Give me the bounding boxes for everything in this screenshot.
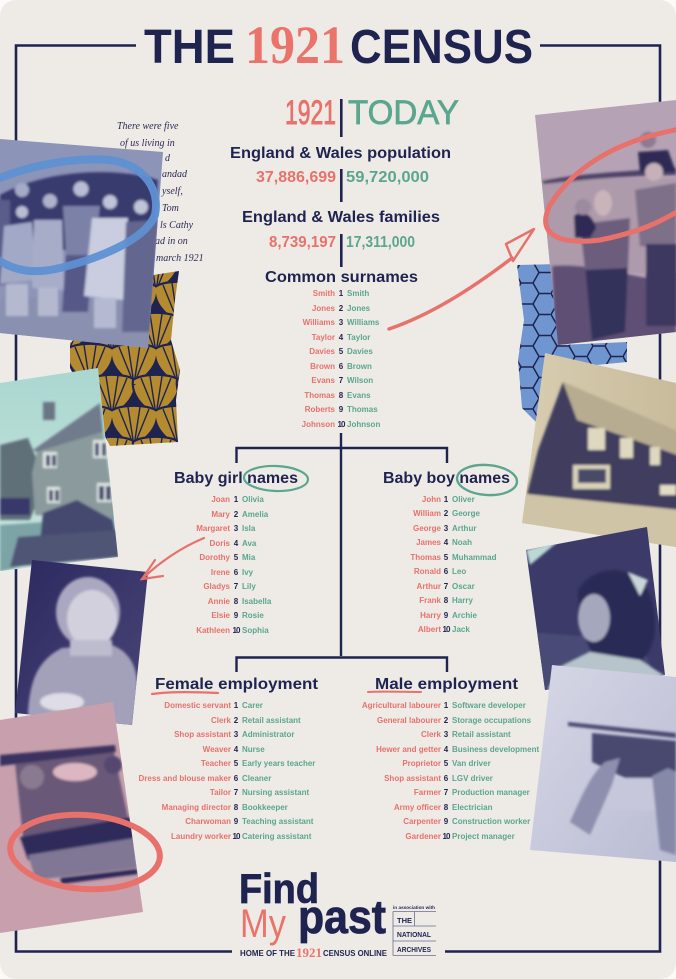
male employment list: Carpenter [403, 817, 441, 826]
baby girl names list: 1 [234, 495, 239, 504]
baby boy names list: Arthur [452, 524, 476, 533]
baby boy names list: Baby boy names [383, 470, 510, 487]
baby boy names list: Jack [452, 625, 470, 634]
common surnames list: 8 [339, 391, 344, 400]
female employment list: Tailor [210, 788, 231, 797]
baby girl names list: 4 [234, 539, 239, 548]
female employment list: Managing director [162, 803, 231, 812]
logo: Findmypast [239, 865, 387, 960]
title: 1921 [245, 15, 345, 75]
handwritten note: Tom [162, 203, 179, 214]
baby girl names list: Sophia [242, 626, 269, 635]
arrow: names to baby photo [142, 538, 204, 579]
baby boy names list: Muhammad [452, 553, 497, 562]
blue ellipse annotation [0, 159, 156, 271]
baby boy names list: 1 [444, 495, 449, 504]
art deco paper scrap [70, 271, 180, 446]
male employment list: Proprietor [402, 759, 441, 768]
male employment list: Army officer [394, 803, 441, 812]
baby boy names list: John [422, 495, 441, 504]
common surnames list: Wilson [347, 376, 373, 385]
female employment list: 9 [234, 817, 239, 826]
male employment list: Storage occupations [452, 716, 532, 725]
baby girl names list: Gladys [203, 582, 231, 591]
population statistic: England & Wales population [230, 145, 451, 162]
baby boy names list: William [413, 509, 441, 518]
female employment list: Teaching assistant [242, 817, 314, 826]
handwritten note: march 1921 [156, 253, 204, 264]
baby girl names list: Doris [210, 539, 231, 548]
baby girl names list: Dorothy [199, 553, 231, 562]
common surnames list: Evans [347, 391, 371, 400]
common surnames list: Johnson [302, 420, 335, 429]
beach scene with parents and children [530, 132, 676, 350]
baby boy names list: Harry [420, 611, 442, 620]
female employment list: 3 [234, 730, 239, 739]
hexagon paper scrap [517, 264, 627, 422]
baby girl names list: Isabella [242, 597, 272, 606]
female employment list: Female employment [155, 676, 319, 693]
common surnames list [265, 269, 418, 429]
baby boy names list: 5 [444, 553, 449, 562]
male employment list: Van driver [452, 759, 491, 768]
female employment list [139, 676, 319, 841]
handwritten note: of us living in [120, 138, 175, 149]
baby boy names list: James [416, 538, 442, 547]
female employment list: 10 [233, 832, 241, 841]
baby girl names list: 2 [234, 510, 239, 519]
female employment list: Clerk [211, 716, 232, 725]
photo: cottage [0, 368, 118, 571]
baby girl names list: Kathleen [196, 626, 230, 635]
baby boy names list: 4 [444, 538, 449, 547]
handwritten note [117, 121, 204, 264]
comparison header: 1921 and today [285, 94, 459, 137]
red ellipse annotation [8, 810, 162, 894]
baby girl names list: 8 [234, 597, 239, 606]
baby boy names list: Archie [452, 611, 477, 620]
male employment list: 7 [444, 788, 449, 797]
baby girl names list: Ava [242, 539, 257, 548]
female employment list: Nurse [242, 745, 265, 754]
male employment list [362, 676, 539, 841]
female employment list: 4 [234, 745, 239, 754]
male employment list: 8 [444, 803, 449, 812]
male employment list: Gardener [405, 832, 441, 841]
common surnames list: Thomas [304, 391, 336, 400]
male employment list: Retail assistant [452, 730, 511, 739]
photo: typewriter [0, 700, 150, 940]
female employment list: Retail assistant [242, 716, 301, 725]
baby girl names list: 5 [234, 553, 239, 562]
male employment list: 9 [444, 817, 449, 826]
female employment list: Carer [242, 701, 263, 710]
arrow: surnames to family photo [389, 229, 534, 329]
common surnames list: Roberts [305, 405, 336, 414]
female employment list: Charwoman [185, 817, 231, 826]
common surnames list: Johnson [347, 420, 380, 429]
baby girl names list: 3 [234, 524, 239, 533]
logo: The National Archives: NATIONAL [397, 932, 432, 939]
handwritten note: There were five [117, 121, 179, 132]
common surnames list: 2 [339, 304, 344, 313]
families statistic: England & Wales families [242, 209, 440, 226]
baby girl names list: Lily [242, 582, 256, 591]
baby girl names list: 9 [234, 611, 239, 620]
male employment list: 3 [444, 730, 449, 739]
male employment list: General labourer [377, 716, 441, 725]
baby boy names list: 7 [444, 582, 449, 591]
photo: baby [15, 560, 148, 725]
baby girl names list: Mary [211, 510, 231, 519]
baby boy names list: Ronald [414, 567, 441, 576]
female employment list: 7 [234, 788, 239, 797]
common surnames list: 9 [339, 405, 344, 414]
common surnames list: Taylor [347, 333, 370, 342]
common surnames list: Evans [311, 376, 336, 385]
male employment list: Production manager [452, 788, 530, 797]
handwritten note: ad in on [155, 236, 188, 247]
title: THE [144, 21, 235, 74]
common surnames list: 1 [339, 289, 344, 298]
male employment list: Business development [452, 745, 539, 754]
female employment list: Laundry worker [171, 832, 231, 841]
female employment list: 2 [234, 716, 239, 725]
common surnames list: 7 [339, 376, 344, 385]
common surnames list: Smith [347, 289, 369, 298]
logo: Findmypast: HOME OF THE [240, 948, 295, 958]
figures: family group [0, 170, 160, 348]
baby girl names list: Margaret [196, 524, 230, 533]
population statistic [230, 145, 451, 202]
baby girl names list: 7 [234, 582, 239, 591]
male employment list: 5 [444, 759, 449, 768]
female employment list: 1 [234, 701, 239, 710]
handwritten note: andad [162, 169, 188, 180]
male employment list: Agricultural labourer [362, 701, 441, 710]
common surnames list: Thomas [347, 405, 378, 414]
common surnames list: Common surnames [265, 269, 418, 286]
male employment list: 10 [443, 832, 451, 841]
title [144, 15, 533, 75]
families statistic: 17,311,000 [346, 234, 415, 251]
laptop and hands [568, 722, 676, 855]
baby girl names list: Baby girl names [174, 470, 298, 487]
logo: The National Archives: THE [397, 916, 412, 925]
common surnames list: 6 [339, 362, 344, 371]
cottage scene [0, 402, 120, 572]
female employment list: Cleaner [242, 774, 271, 783]
red ellipse annotation: modern family [546, 129, 676, 241]
male employment list: Shop assistant [384, 774, 441, 783]
female employment list: Dress and blouse maker [139, 774, 231, 783]
baby boy names list: George [413, 524, 442, 533]
baby boy names list: Leo [452, 567, 466, 576]
baby boy names list: 8 [444, 596, 449, 605]
male employment list: Clerk [421, 730, 442, 739]
male employment list: Electrician [452, 803, 493, 812]
baby girl names list: Irene [211, 568, 231, 577]
baby girl names list: Elsie [211, 611, 231, 620]
common surnames list: Davies [309, 347, 336, 356]
baby boy names list: 9 [444, 611, 449, 620]
logo: Findmypast: Find [239, 865, 319, 912]
common surnames list: 3 [339, 318, 344, 327]
common surnames list: Smith [313, 289, 335, 298]
baby girl names list [174, 465, 308, 635]
female employment list: 6 [234, 774, 239, 783]
families statistic: 8,739,197 [269, 234, 336, 251]
common surnames list: Taylor [312, 333, 335, 342]
common surnames list: 4 [339, 333, 344, 342]
baby girl names list: Annie [208, 597, 231, 606]
population statistic: 37,886,699 [256, 169, 336, 186]
baby boy names list: Frank [419, 596, 442, 605]
logo: Findmypast: past [298, 890, 386, 943]
logo: Findmypast: My [240, 902, 286, 946]
common surnames list: Brown [310, 362, 335, 371]
handwritten note: ls Cathy [160, 220, 194, 231]
female employment list: 5 [234, 759, 239, 768]
male employment list: 1 [444, 701, 449, 710]
common surnames list: Davies [347, 347, 373, 356]
common surnames list: Jones [347, 304, 371, 313]
photo: modern family [530, 95, 676, 350]
baby girl names list: Joan [211, 495, 230, 504]
title: CENSUS [350, 21, 533, 74]
male employment list: Male employment [375, 676, 519, 693]
female employment list: Nursing assistant [242, 788, 309, 797]
baby figure [28, 577, 138, 730]
female employment list: Shop assistant [174, 730, 231, 739]
baby boy names list: 10 [443, 625, 451, 634]
baby boy names list: Arthur [417, 582, 441, 591]
logo: The National Archives [393, 905, 436, 956]
male employment list: Project manager [452, 832, 515, 841]
baby girl names list: Olivia [242, 495, 264, 504]
baby boy names list [383, 463, 518, 634]
female employment list: Administrator [242, 730, 294, 739]
baby boy names list: 6 [444, 567, 449, 576]
baby girl names list: 6 [234, 568, 239, 577]
common surnames list: Jones [312, 304, 336, 313]
male employment list: Hewer and getter [376, 745, 441, 754]
baby boy names list: Thomas [410, 553, 442, 562]
logo: Findmypast: 1921 [296, 945, 322, 960]
female employment list: Early years teacher [242, 759, 315, 768]
male employment list: 2 [444, 716, 449, 725]
female employment list: Bookkeeper [242, 803, 288, 812]
baby girl names list: Isla [242, 524, 256, 533]
baby boy names list: Harry [452, 596, 473, 605]
female employment list: Weaver [203, 745, 231, 754]
common surnames list: 5 [339, 347, 344, 356]
baby boy names list: Noah [452, 538, 472, 547]
male employment list: LGV driver [452, 774, 493, 783]
population statistic: 59,720,000 [346, 169, 429, 186]
female employment list: Teacher [201, 759, 231, 768]
baby girl names list: Amelia [242, 510, 269, 519]
male employment list: Construction worker [452, 817, 530, 826]
house building [522, 382, 676, 550]
comparison header: 1921 and today: TODAY [348, 94, 459, 132]
girl figure [526, 540, 665, 690]
female employment list: Domestic servant [164, 701, 231, 710]
baby boy names list: Oliver [452, 495, 475, 504]
male employment list: Software developer [452, 701, 526, 710]
photo: hands on laptop [525, 660, 676, 865]
families statistic [242, 209, 440, 267]
male employment list: 4 [444, 745, 449, 754]
baby girl names list: Rosie [242, 611, 264, 620]
handwritten note: d [165, 153, 171, 164]
female employment list: Catering assistant [242, 832, 312, 841]
logo: The National Archives: ARCHIVES [397, 947, 431, 954]
common surnames list: Brown [347, 362, 372, 371]
baby boy names list: 3 [444, 524, 449, 533]
common surnames list: 10 [338, 420, 346, 429]
baby boy names list: Oscar [452, 582, 475, 591]
baby girl names list: Mia [242, 553, 256, 562]
male employment list: Farmer [414, 788, 441, 797]
baby boy names list: George [452, 509, 481, 518]
typewriter machine [0, 745, 138, 884]
comparison header: 1921 and today: 1921 [285, 94, 336, 132]
logo: Findmypast: CENSUS ONLINE [323, 948, 387, 958]
photo: new-build house [522, 353, 676, 547]
connector tree [236, 433, 447, 672]
male employment list: 6 [444, 774, 449, 783]
logo: The National Archives: in association with [393, 905, 435, 910]
photo: smiling girl [526, 527, 665, 690]
baby girl names list: 10 [233, 626, 241, 635]
handwritten note: yself, [161, 186, 183, 197]
baby boy names list: Albert [418, 625, 441, 634]
female employment list: 8 [234, 803, 239, 812]
common surnames list: Williams [347, 318, 380, 327]
common surnames list: Williams [303, 318, 336, 327]
baby boy names list: 2 [444, 509, 449, 518]
baby girl names list: Ivy [242, 568, 254, 577]
photo: family in 1921 [0, 139, 163, 348]
